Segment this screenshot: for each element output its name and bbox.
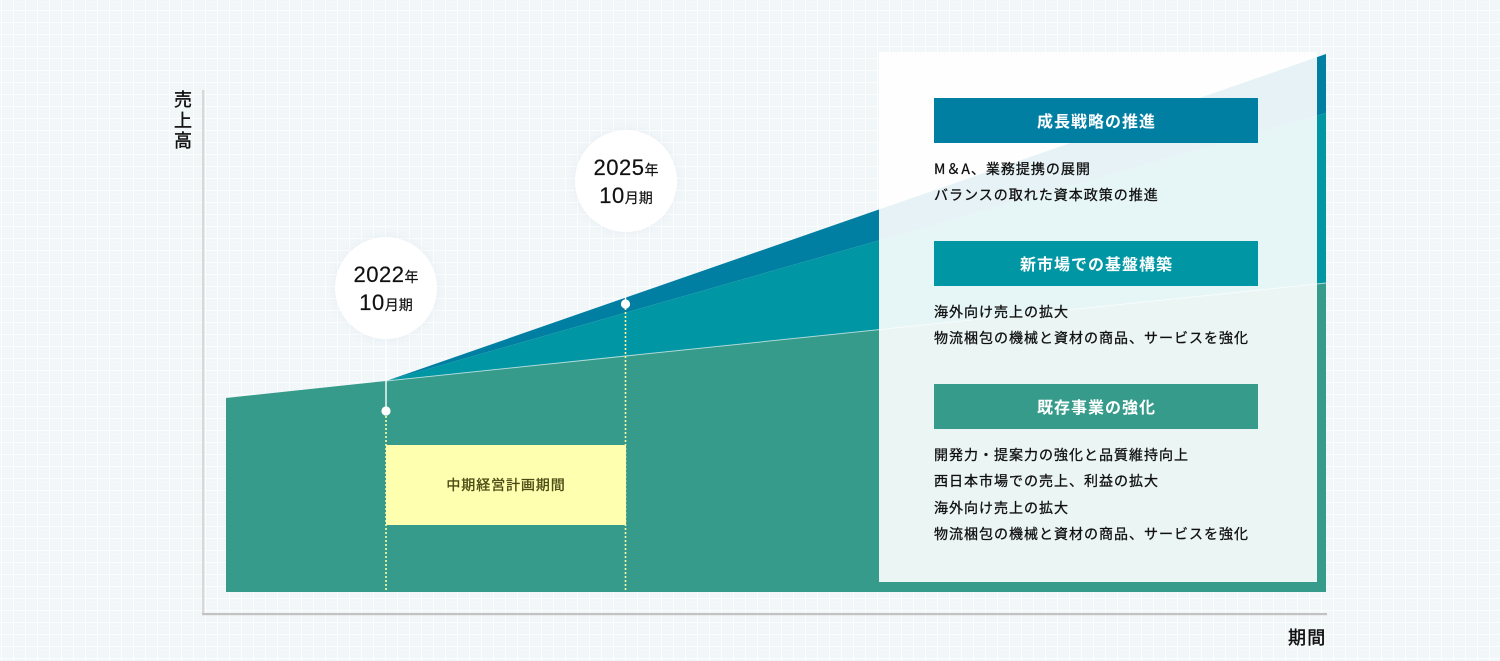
- x axis label: 期間: [1288, 624, 1327, 650]
- area: growth strategy: [386, 54, 1326, 381]
- text: new market items: 物流梱包の機械と資材の商品、サービスを強化: [934, 328, 1249, 348]
- y axis label: [174, 86, 192, 153]
- text: existing business items: [934, 445, 1249, 544]
- area: new market: [386, 113, 1326, 381]
- text: existing business items: 開発力・提案力の強化と品質維持向上: [934, 445, 1189, 465]
- heading: new market: [934, 241, 1258, 286]
- date bubble: 2022: 2022年: [354, 262, 418, 287]
- heading: growth strategy: [934, 98, 1258, 143]
- plan period box: 中期経営計画期間: [446, 475, 566, 495]
- text: existing business items: 西日本市場での売上、利益の拡大: [934, 471, 1159, 491]
- text: growth strategy items: バランスの取れた資本政策の推進: [934, 185, 1159, 205]
- text: growth strategy items: [934, 159, 1159, 205]
- date bubble: 2025: 10月期: [599, 183, 653, 208]
- x axis line: [202, 613, 1327, 615]
- y axis label: 上: [174, 106, 192, 132]
- text: existing business items: 物流梱包の機械と資材の商品、サービスを強化: [934, 524, 1249, 544]
- panel: strategy details: [879, 52, 1317, 582]
- date bubble: 2022: [335, 237, 437, 339]
- text: existing business items: 海外向け売上の拡大: [934, 498, 1069, 518]
- heading: existing business: 既存事業の強化: [1037, 394, 1156, 418]
- text: new market items: [934, 302, 1249, 348]
- area chart: sales growth by layer: [226, 54, 1326, 592]
- plan period box: [386, 445, 626, 525]
- date bubble: 2025: [575, 130, 677, 232]
- period marker lines: [381, 228, 630, 592]
- heading: existing business: [934, 384, 1258, 429]
- y axis line: [202, 90, 204, 615]
- y axis label: 高: [174, 127, 192, 153]
- text: growth strategy items: M＆A、業務提携の展開: [934, 159, 1091, 179]
- heading: new market: 新市場での基盤構築: [1020, 251, 1173, 275]
- heading: growth strategy: 成長戦略の推進: [1037, 108, 1156, 132]
- y axis label: 売: [174, 86, 192, 112]
- date bubble: 2022: 10月期: [359, 290, 413, 315]
- area: existing business: [226, 283, 1326, 592]
- date bubble: 2025: 2025年: [594, 155, 658, 180]
- text: new market items: 海外向け売上の拡大: [934, 302, 1069, 322]
